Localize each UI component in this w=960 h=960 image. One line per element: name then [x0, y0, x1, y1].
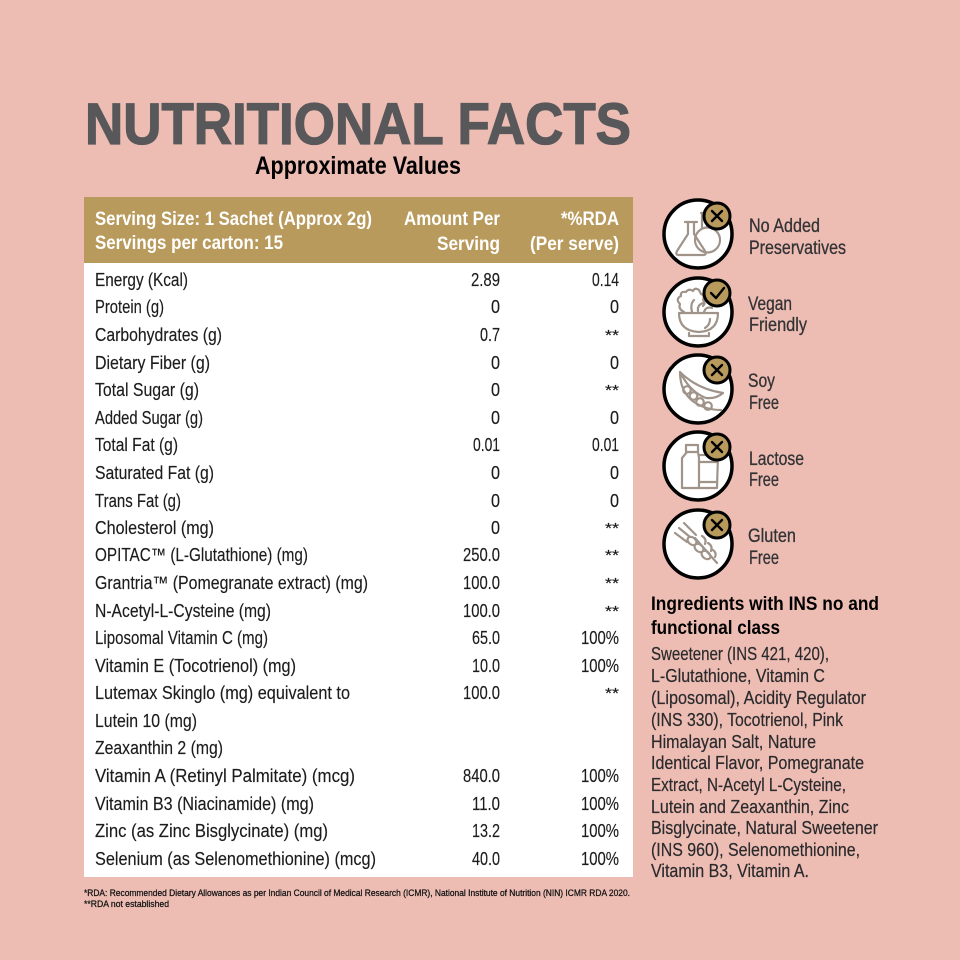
table rows: 100%	[581, 794, 619, 814]
label: gluten free: Gluten	[748, 526, 796, 547]
table rows: 250.0	[463, 545, 500, 565]
table rows: **	[605, 685, 619, 702]
table rows: 65.0	[472, 628, 500, 648]
icon: lactose free	[664, 432, 732, 500]
label: soy free: Free	[749, 393, 779, 414]
table rows: 0	[610, 463, 619, 483]
label: soy free: Soy	[748, 371, 775, 392]
footnote	[84, 888, 630, 909]
table rows: 0	[491, 463, 500, 483]
table rows: 0	[491, 491, 500, 511]
label: no added preservatives	[749, 216, 846, 259]
table rows: 100.0	[463, 601, 500, 621]
table rows: 100%	[581, 849, 619, 869]
label: lactose free	[749, 449, 804, 491]
table rows: Cholesterol (mg)	[95, 518, 214, 538]
text block: ingredients list: Identical Flavor, Pomegranate	[651, 753, 864, 773]
table rows: Lutemax Skinglo (mg) equivalent to	[95, 683, 350, 703]
text block: ingredients list	[651, 644, 878, 881]
label: no added preservatives: Preservatives	[749, 238, 846, 259]
icon: soy free	[664, 355, 732, 423]
table rows: 0	[491, 353, 500, 373]
table rows: 100.0	[463, 573, 500, 593]
table rows: 2.89	[471, 270, 500, 290]
table rows: Zeaxanthin 2 (mg)	[95, 738, 223, 758]
label: gluten free	[748, 526, 796, 569]
text block: ingredients list: Bisglycinate, Natural Sweetener	[651, 818, 878, 838]
table rows	[95, 270, 619, 869]
label: soy free	[748, 371, 779, 414]
table rows: Liposomal Vitamin C (mg)	[95, 628, 268, 648]
table rows: 0	[610, 491, 619, 511]
table rows: Saturated Fat (g)	[95, 463, 214, 483]
table rows: 11.0	[472, 794, 500, 814]
heading: ingredients: Ingredients with INS no and	[651, 594, 879, 615]
table rows: 100.0	[463, 683, 500, 703]
table rows: 0	[610, 408, 619, 428]
table rows: 0.01	[473, 435, 500, 455]
table rows: **	[605, 603, 619, 620]
table header: Serving	[437, 234, 500, 255]
text block: ingredients list: Vitamin B3, Vitamin A.	[651, 861, 809, 881]
icon: gluten free	[664, 510, 732, 578]
table rows: **	[605, 547, 619, 564]
icon: no added preservatives	[664, 200, 732, 268]
table header: (Per serve)	[530, 234, 619, 255]
table rows: Vitamin B3 (Niacinamide) (mg)	[95, 794, 314, 814]
table rows: 0	[610, 297, 619, 317]
text block: ingredients list: (INS 330), Tocotrienol, Pink	[651, 710, 844, 730]
footnote: *RDA: Recommended Dietary Allowances as per Indian Council of Medical Research (ICMR), National Institute of Nutrition (NIN) ICMR RDA 2020.	[84, 888, 630, 898]
subtitle: Approximate Values	[255, 152, 461, 180]
table rows: **	[605, 520, 619, 537]
table header: Amount Per	[404, 209, 501, 230]
label: vegan friendly: Vegan	[748, 294, 792, 315]
table rows: Trans Fat (g)	[95, 491, 181, 511]
table rows: Vitamin E (Tocotrienol) (mg)	[95, 656, 296, 676]
table rows: 0.7	[480, 325, 500, 345]
label: gluten free: Free	[749, 548, 779, 569]
table rows: Total Fat (g)	[95, 435, 178, 455]
table rows: Carbohydrates (g)	[95, 325, 222, 345]
table rows: 40.0	[472, 849, 500, 869]
table header: *%RDA	[561, 209, 619, 230]
heading: ingredients	[651, 594, 879, 639]
table rows: 100%	[581, 821, 619, 841]
table rows: Zinc (as Zinc Bisglycinate) (mg)	[95, 821, 328, 841]
table rows: 840.0	[463, 766, 500, 786]
table rows: Protein (g)	[95, 297, 164, 317]
icon: vegan friendly	[664, 278, 732, 346]
label: lactose free: Free	[749, 470, 779, 491]
table rows: Vitamin A (Retinyl Palmitate) (mcg)	[95, 766, 355, 786]
table rows: 0.14	[592, 270, 619, 290]
label: vegan friendly: Friendly	[749, 315, 807, 336]
table rows: 100%	[581, 766, 619, 786]
table rows: **	[605, 575, 619, 592]
table rows: 0	[491, 408, 500, 428]
table rows: 100%	[581, 656, 619, 676]
heading: ingredients: functional class	[651, 618, 780, 639]
table rows: 0	[491, 518, 500, 538]
text block: ingredients list: (INS 960), Selenomethionine,	[651, 840, 860, 860]
table rows: 10.0	[472, 656, 500, 676]
text block: ingredients list: Extract, N-Acetyl L-Cysteine,	[651, 775, 846, 795]
table rows: 100%	[581, 628, 619, 648]
table rows: Dietary Fiber (g)	[95, 353, 210, 373]
table rows: 0	[491, 297, 500, 317]
text block: ingredients list: Himalayan Salt, Nature	[651, 732, 816, 752]
title: NUTRITIONAL FACTS	[85, 92, 631, 157]
table rows: **	[605, 327, 619, 344]
table rows: Added Sugar (g)	[95, 408, 203, 428]
table rows: N-Acetyl-L-Cysteine (mg)	[95, 601, 271, 621]
text block: ingredients list: (Liposomal), Acidity Regulator	[651, 688, 866, 708]
table rows: **	[605, 382, 619, 399]
table rows: Lutein 10 (mg)	[95, 711, 197, 731]
label: vegan friendly	[748, 294, 807, 336]
panel: nutrition table	[84, 197, 633, 877]
table rows: Selenium (as Selenomethionine) (mcg)	[95, 849, 376, 869]
table rows: 0.01	[592, 435, 619, 455]
text block: ingredients list: Lutein and Zeaxanthin, Zinc	[651, 797, 849, 817]
table rows: 13.2	[472, 821, 500, 841]
text block: ingredients list: Sweetener (INS 421, 420),	[651, 644, 829, 664]
label: lactose free: Lactose	[749, 449, 804, 470]
text block: ingredients list: L-Glutathione, Vitamin C	[651, 666, 825, 686]
table rows: 0	[491, 380, 500, 400]
table header: Servings per carton: 15	[95, 233, 283, 254]
table rows: Energy (Kcal)	[95, 270, 188, 290]
table header: Serving Size: 1 Sachet (Approx 2g)	[95, 209, 372, 230]
table rows: 0	[610, 353, 619, 373]
footnote: **RDA not established	[84, 899, 169, 909]
table header	[84, 197, 633, 263]
label: no added preservatives: No Added	[749, 216, 820, 237]
table rows: Grantria™ (Pomegranate extract) (mg)	[95, 573, 368, 593]
table rows: OPITAC™ (L-Glutathione) (mg)	[95, 545, 308, 565]
table rows: Total Sugar (g)	[95, 380, 199, 400]
